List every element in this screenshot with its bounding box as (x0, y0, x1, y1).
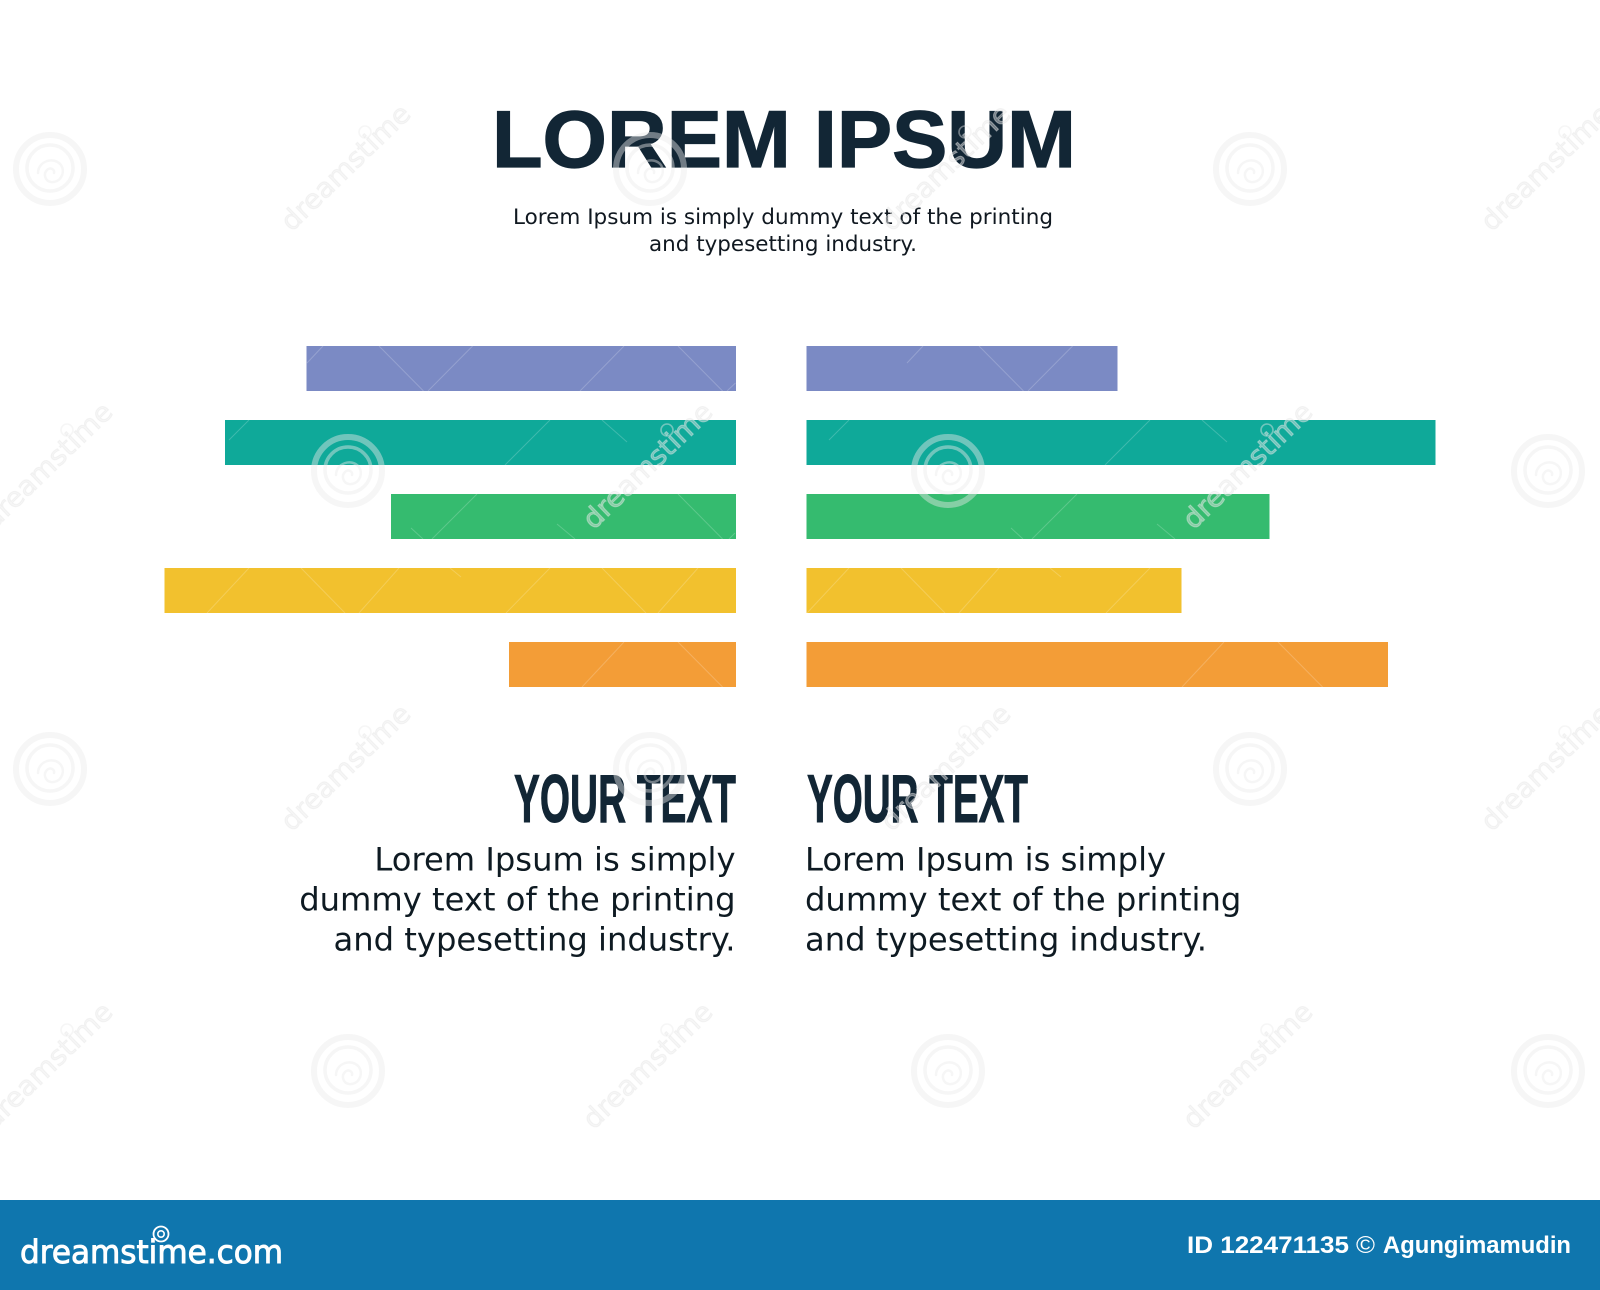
left text block: and typesetting industry. (334, 920, 736, 958)
icon: footer logo spiral (154, 1226, 168, 1242)
right text block: Lorem Ipsum is simply (805, 840, 1166, 878)
right heading: YOUR TEXT (807, 761, 1028, 837)
subtitle text block (513, 205, 1053, 257)
right bar: teal (806, 420, 1436, 465)
footer image id and credit: © (1356, 1232, 1375, 1259)
right bar chart (806, 346, 1436, 687)
left text block (299, 840, 736, 958)
left text block: dummy text of the printing (299, 880, 736, 918)
left bar chart (164, 346, 736, 687)
footer image id and credit (1187, 1232, 1571, 1259)
footer logo wordmark: dreamstime.com (20, 1233, 283, 1271)
footer band (0, 1200, 1600, 1290)
right bar: orange (806, 642, 1388, 687)
watermark spirals (16, 135, 1582, 1105)
subtitle text block: and typesetting industry. (649, 232, 917, 257)
right text block: dummy text of the printing (805, 880, 1241, 918)
footer image id and credit: ID 122471135 (1187, 1232, 1349, 1259)
left heading: YOUR TEXT (514, 761, 736, 837)
title: LOREM IPSUM (492, 95, 1076, 185)
right text block (805, 840, 1241, 958)
right text block: and typesetting industry. (805, 920, 1207, 958)
footer image id and credit: Agungimamudin (1383, 1232, 1571, 1259)
left bar: teal (225, 420, 736, 465)
right bar: green (806, 494, 1270, 539)
right bar: purple (806, 346, 1118, 391)
left bar: purple (306, 346, 736, 391)
left bar: yellow (164, 568, 736, 613)
subtitle text block: Lorem Ipsum is simply dummy text of the printing (513, 205, 1053, 230)
left bar: green (391, 494, 736, 539)
right bar: yellow (806, 568, 1182, 613)
left bar: orange (509, 642, 736, 687)
left text block: Lorem Ipsum is simply (374, 840, 736, 878)
